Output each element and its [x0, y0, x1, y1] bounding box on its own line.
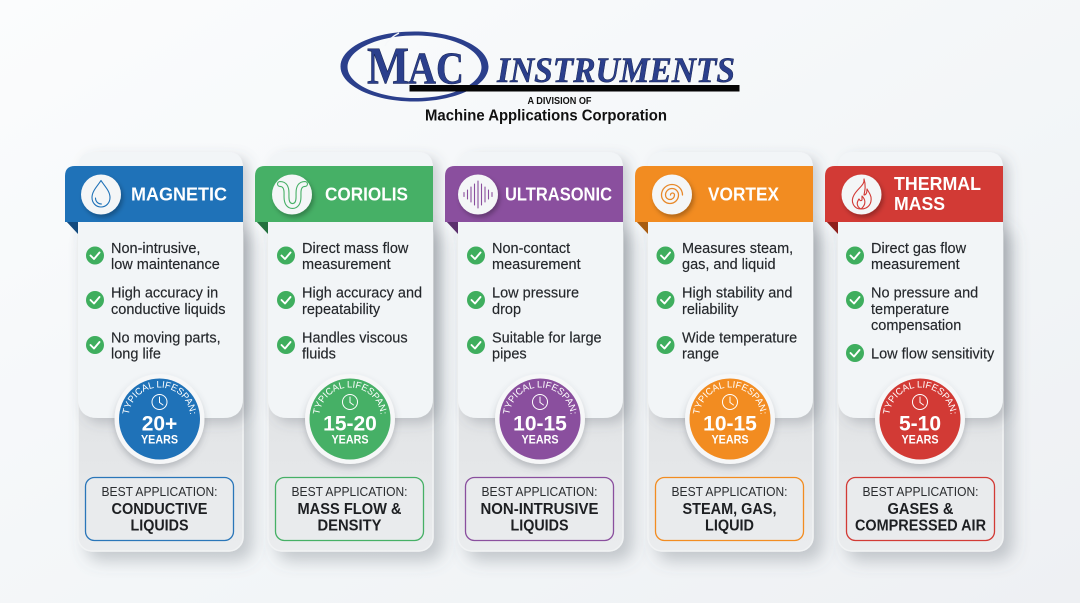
benefit 2 — [846, 286, 978, 334]
lifespan badge: TYPICAL LIFESPAN: — [122, 381, 196, 414]
benefit 3: Wide temperature — [682, 330, 797, 346]
logo oval — [340, 32, 488, 102]
benefit 2: drop — [492, 302, 521, 318]
banner fold — [65, 220, 78, 234]
benefit 3 — [467, 330, 602, 362]
lifespan badge — [492, 378, 588, 471]
best application box: BEST APPLICATION: — [292, 485, 408, 499]
benefit 1: measurement — [871, 257, 960, 273]
lifespan badge: YEARS — [902, 434, 939, 446]
heading: ULTRASONIC — [505, 184, 612, 204]
upper card — [458, 152, 623, 418]
best application box: GASES & — [888, 501, 954, 518]
panel: magnetic — [65, 152, 261, 568]
lifespan badge — [682, 378, 778, 471]
upper card — [838, 152, 1003, 418]
banner fold — [255, 220, 268, 234]
best application box: BEST APPLICATION: — [102, 485, 218, 499]
icon: water drop — [81, 174, 121, 214]
heading: MAGNETIC — [131, 184, 227, 204]
best application box: COMPRESSED AIR — [855, 518, 986, 534]
header banner — [825, 166, 1003, 222]
lower card — [458, 220, 623, 551]
lifespan badge: YEARS — [712, 434, 749, 446]
benefit 1: Direct gas flow — [871, 241, 967, 257]
benefit 2: High stability and — [682, 286, 792, 302]
benefit 1: measurement — [302, 257, 391, 273]
lifespan badge: YEARS — [141, 434, 178, 446]
best application box: CONDUCTIVE — [112, 501, 208, 518]
benefit 2: No pressure and — [871, 286, 978, 302]
icon: sound wave — [458, 174, 498, 214]
best application box: LIQUIDS — [130, 518, 188, 534]
lifespan badge: 10-15 — [703, 412, 757, 436]
benefit 3 — [86, 330, 221, 362]
banner fold — [635, 220, 648, 234]
benefit 1: Non-intrusive, — [111, 241, 200, 257]
best application box: BEST APPLICATION: — [672, 485, 788, 499]
best application box: LIQUID — [705, 518, 754, 534]
benefit 2 — [86, 286, 225, 318]
panel: ultrasonic — [445, 152, 641, 568]
logo AC letters: AC — [408, 44, 464, 94]
lifespan badge: YEARS — [332, 434, 369, 446]
lower card — [838, 220, 1003, 551]
benefit 2: repeatability — [302, 302, 381, 318]
lifespan badge: TYPICAL LIFESPAN: — [692, 381, 766, 414]
benefit 3: Low flow sensitivity — [871, 346, 995, 362]
icon: U pipe — [272, 174, 312, 214]
logo INSTRUMENTS wordmark: INSTRUMENTS — [496, 50, 735, 90]
lifespan badge: 15-20 — [323, 412, 377, 436]
lifespan badge — [112, 378, 208, 471]
lifespan badge — [302, 378, 398, 471]
heading: CORIOLIS — [325, 184, 408, 204]
benefit 1 — [86, 241, 220, 273]
benefit 1 — [277, 241, 409, 273]
benefit 2: conductive liquids — [111, 302, 225, 318]
benefit 2: High accuracy and — [302, 286, 422, 302]
lifespan badge: 5-10 — [899, 412, 941, 436]
benefit 2 — [467, 286, 579, 318]
lifespan badge: YEARS — [522, 434, 559, 446]
logo corporation name: Machine Applications Corporation — [425, 108, 667, 124]
upper card — [648, 152, 813, 418]
lower card — [648, 220, 813, 551]
panel: thermal mass — [825, 152, 1021, 568]
header banner — [445, 166, 623, 222]
benefit 2: compensation — [871, 318, 961, 334]
panel: vortex — [635, 152, 831, 568]
benefit 1 — [656, 241, 793, 273]
benefit 3: Handles viscous — [302, 330, 408, 346]
best application box — [466, 478, 614, 540]
best application box: BEST APPLICATION: — [482, 485, 598, 499]
icon: spiral — [652, 174, 692, 214]
benefit 3: pipes — [492, 346, 527, 362]
logo bar — [410, 85, 740, 92]
lifespan badge — [872, 378, 968, 471]
best application box: DENSITY — [318, 518, 382, 534]
benefit 1 — [846, 241, 967, 273]
logo M letter: M — [367, 38, 409, 96]
benefit 1: Direct mass flow — [302, 241, 409, 257]
lifespan badge: 10-15 — [513, 412, 567, 436]
upper card — [78, 152, 243, 418]
best application box — [656, 478, 804, 540]
header banner — [65, 166, 243, 222]
benefit 3: fluids — [302, 346, 336, 362]
heading: MASS — [894, 194, 945, 214]
logo division line: A DIVISION OF — [528, 96, 592, 107]
banner fold — [825, 220, 838, 234]
benefit 1 — [467, 241, 581, 273]
benefit 3: No moving parts, — [111, 330, 221, 346]
logo: MAC Instruments — [340, 32, 740, 124]
benefit 2: reliability — [682, 302, 739, 318]
benefit 2 — [277, 286, 422, 318]
benefit 3: long life — [111, 346, 161, 362]
header banner — [635, 166, 813, 222]
benefit 3: range — [682, 346, 719, 362]
header banner — [255, 166, 433, 222]
benefit 2: temperature — [871, 302, 949, 318]
benefit 3 — [277, 330, 408, 362]
benefit 1: measurement — [492, 257, 581, 273]
lifespan badge: TYPICAL LIFESPAN: — [882, 381, 956, 414]
best application box: LIQUIDS — [510, 518, 568, 534]
best application box: NON-INTRUSIVE — [480, 501, 598, 518]
lifespan badge: 20+ — [142, 412, 177, 436]
benefit 3 — [656, 330, 797, 362]
benefit 1: low maintenance — [111, 257, 220, 273]
lifespan badge: TYPICAL LIFESPAN: — [502, 381, 576, 414]
benefit 2 — [656, 286, 792, 318]
heading: THERMAL — [894, 174, 981, 194]
panel: coriolis — [255, 152, 451, 568]
best application box — [276, 478, 424, 540]
benefit 2: High accuracy in — [111, 286, 218, 302]
best application box: BEST APPLICATION: — [862, 485, 978, 499]
benefit 1: Measures steam, — [682, 241, 793, 257]
best application box — [86, 478, 234, 540]
lifespan badge: TYPICAL LIFESPAN: — [312, 381, 386, 414]
best application box: MASS FLOW & — [298, 501, 402, 518]
upper card — [268, 152, 433, 418]
benefit 1: gas, and liquid — [682, 257, 776, 273]
logo oval notch — [385, 33, 399, 46]
lower card — [78, 220, 243, 551]
benefit 3: Suitable for large — [492, 330, 602, 346]
banner fold — [445, 220, 458, 234]
best application box — [846, 478, 994, 540]
benefit 2: Low pressure — [492, 286, 579, 302]
icon: flame — [842, 174, 882, 214]
heading: VORTEX — [708, 184, 779, 204]
lower card — [268, 220, 433, 551]
best application box: STEAM, GAS, — [682, 501, 776, 518]
benefit 1: Non-contact — [492, 241, 570, 257]
